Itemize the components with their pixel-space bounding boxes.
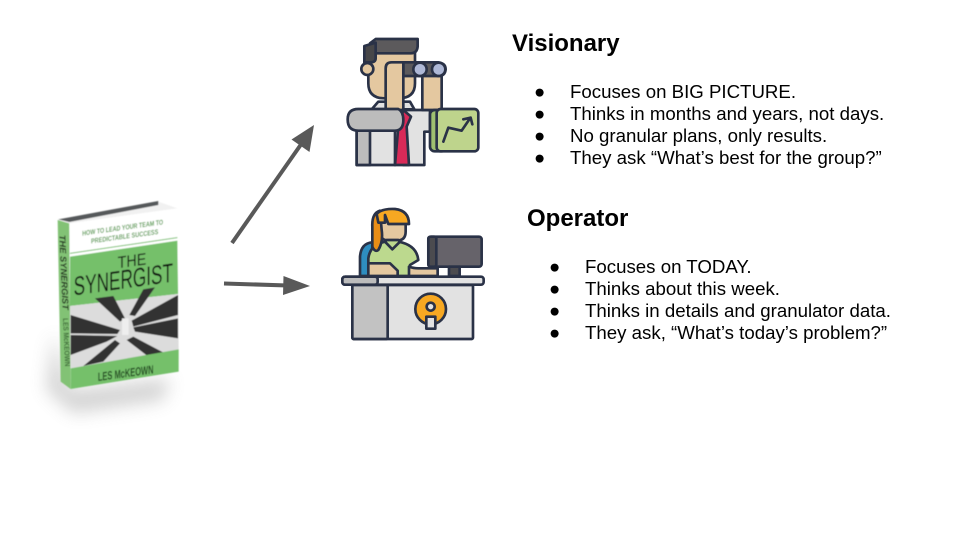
chart line	[443, 118, 472, 142]
desk logo	[415, 294, 446, 324]
heading: Visionary: Visionary	[512, 30, 620, 57]
ear	[361, 63, 373, 75]
list: operator traits	[549, 256, 891, 343]
arrow: book to visionary	[232, 125, 314, 243]
list: visionary traits: ●	[534, 81, 545, 102]
chair	[360, 242, 372, 276]
book title	[74, 246, 173, 302]
icon: visionary with binoculars	[348, 39, 478, 165]
photo background	[70, 294, 179, 368]
list: operator traits: ●	[549, 300, 560, 321]
list: operator traits: Thinks in details and granulator data.	[585, 300, 891, 321]
body and shirt	[357, 123, 395, 165]
arrow: book to operator	[224, 276, 310, 295]
photo: dominoes	[71, 287, 178, 366]
center domino	[122, 318, 129, 335]
spine text	[57, 235, 73, 367]
spine text: LES McKEOWN	[61, 318, 72, 367]
list: visionary traits: Focuses on BIG PICTURE.	[570, 81, 796, 102]
list: visionary traits: No granular plans, only results.	[570, 125, 827, 146]
tie	[395, 110, 411, 165]
hair	[377, 209, 409, 224]
book: The Synergist	[47, 201, 179, 413]
right arm	[409, 267, 438, 276]
list: operator traits: ●	[549, 256, 560, 277]
monitor	[428, 237, 482, 267]
book title: THE	[118, 249, 146, 272]
list: operator traits: ●	[549, 278, 560, 299]
right arm	[422, 75, 442, 110]
list: visionary traits: ●	[534, 103, 545, 124]
torso	[368, 242, 418, 276]
desk base	[352, 285, 473, 339]
spine	[58, 220, 71, 389]
list: operator traits: ●	[549, 322, 560, 343]
sleeve arm	[348, 109, 403, 131]
spine text: THE SYNERGIST	[57, 235, 71, 311]
book title: SYNERGIST	[74, 258, 173, 302]
head	[380, 220, 406, 241]
book subtitle: HOW TO LEAD YOUR TEAM TO	[82, 219, 164, 238]
list: operator traits: Focuses on TODAY.	[585, 256, 752, 277]
book subtitle	[82, 219, 164, 247]
list: visionary traits: Thinks in months and years, not days.	[570, 103, 884, 124]
desk top	[342, 277, 484, 285]
front cover	[69, 208, 179, 389]
list: operator traits: They ask, “What’s today’s problem?”	[585, 322, 887, 343]
list: visionary traits	[534, 81, 884, 168]
forearm	[386, 62, 403, 110]
list: visionary traits: ●	[534, 147, 545, 168]
icon: operator at desk	[342, 209, 484, 339]
green title band	[70, 241, 178, 306]
heading: Operator: Operator	[527, 205, 628, 232]
left arm	[368, 263, 398, 276]
hair	[370, 39, 418, 53]
bottom green band	[71, 349, 179, 389]
book shadow	[47, 333, 170, 413]
ponytail	[372, 211, 382, 251]
list: visionary traits: ●	[534, 125, 545, 146]
binoculars	[403, 62, 446, 76]
list: visionary traits: They ask “What’s best for the group?”	[570, 147, 882, 168]
list: operator traits: Thinks about this week.	[585, 278, 780, 299]
page edge at top	[58, 202, 177, 223]
face	[368, 50, 415, 98]
book author: LES McKEOWN	[98, 362, 153, 384]
collar	[385, 240, 400, 249]
chart board	[430, 110, 447, 151]
book subtitle: PREDICTABLE SUCCESS	[91, 229, 159, 245]
